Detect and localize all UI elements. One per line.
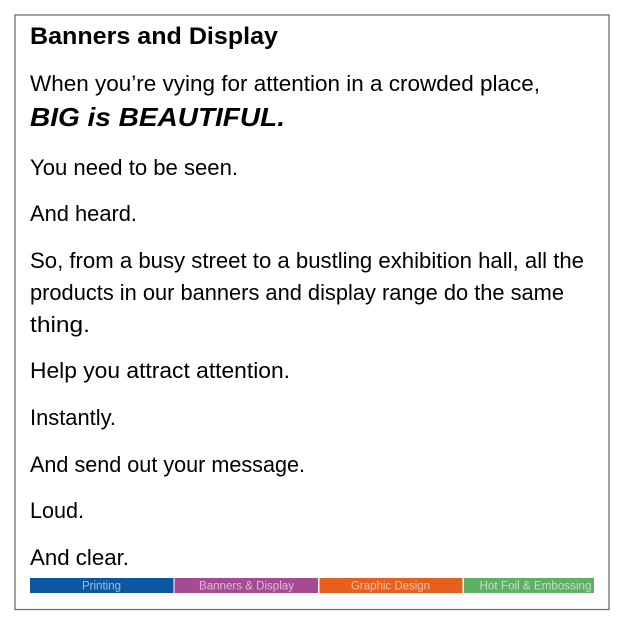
tab: Hot Foil & Embossing [464, 578, 594, 593]
navigation colour bar [30, 578, 594, 593]
tab: Banners & Display: Banners & Display [199, 580, 294, 592]
text block: And heard: And heard. [30, 201, 137, 226]
text block: Loud: Loud. [30, 498, 84, 523]
text block: busy street paragraph: So, from a busy street to a bustling exhibition hall, all the [30, 248, 584, 273]
text block: busy street paragraph [30, 248, 584, 337]
text block: intro with slogan: BIG is BEAUTIFUL. [30, 102, 285, 132]
text block: busy street paragraph: thing. [30, 312, 90, 337]
text block: Help you attract attention: Help you attract attention. [30, 358, 290, 383]
text block: intro with slogan [30, 71, 540, 132]
tab: Banners & Display [174, 578, 318, 593]
text block: intro with slogan: When you’re vying for attention in a crowded place, [30, 71, 540, 96]
tab: Printing: Printing [82, 580, 121, 592]
tab: Graphic Design: Graphic Design [351, 580, 430, 592]
tab: Hot Foil & Embossing: Hot Foil & Embossing [480, 580, 592, 592]
text block: busy street paragraph: products in our banners and display range do the same [30, 280, 564, 305]
text block: You need to be seen: You need to be seen. [30, 155, 238, 180]
text block: And clear: And clear. [30, 545, 129, 570]
text block: Instantly: Instantly. [30, 405, 116, 430]
heading: Banners and Display: Banners and Display [30, 23, 279, 50]
tab: Printing [30, 578, 174, 593]
tab: Graphic Design [320, 578, 462, 593]
text block: And send out your message: And send out your message. [30, 452, 305, 477]
